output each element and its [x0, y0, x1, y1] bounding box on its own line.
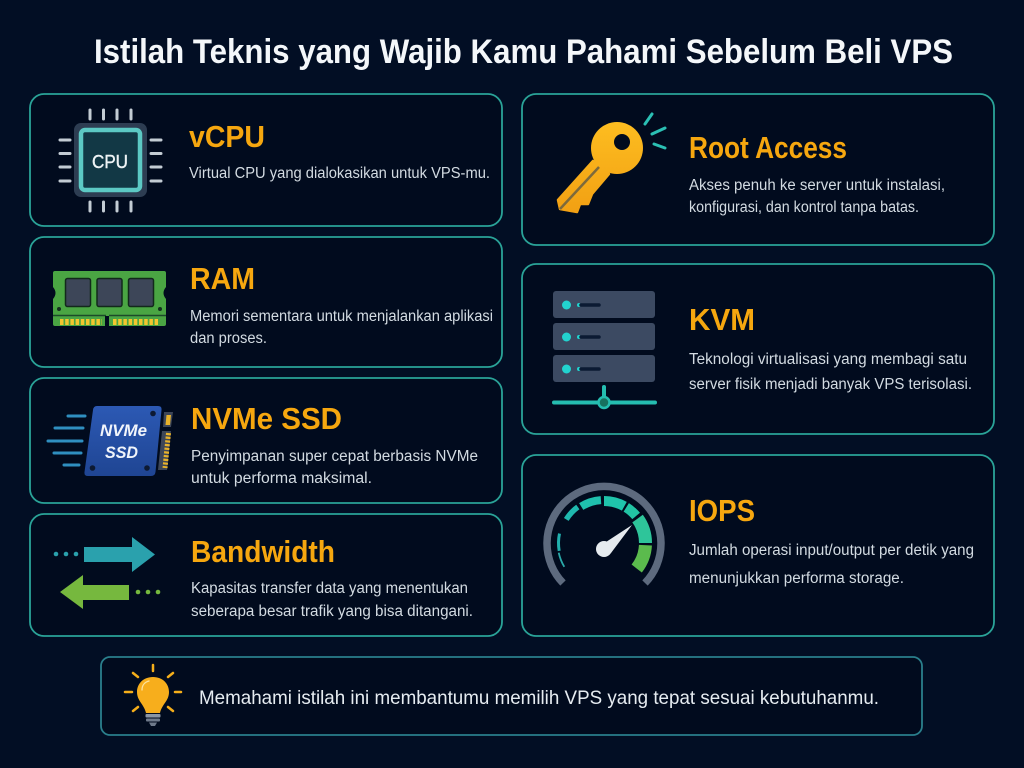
- description: KVM: [689, 351, 972, 393]
- description: IOPS: Jumlah operasi input/output per detik yang: [689, 542, 974, 559]
- panel: KVM: [522, 264, 994, 434]
- heading: vCPU: vCPU: [189, 119, 265, 154]
- icon: NVMe SSD drive: NVMe: [100, 422, 147, 440]
- panel: vCPU: [30, 94, 502, 226]
- icon: NVMe SSD drive: [48, 406, 173, 476]
- icon: CPU chip: [60, 110, 161, 211]
- description: Bandwidth: seberapa besar trafik yang bisa ditangani.: [191, 603, 473, 620]
- description: NVMe SSD: Penyimpanan super cepat berbasis NVMe: [191, 448, 478, 465]
- description: RAM: dan proses.: [190, 330, 267, 347]
- panel: NVMe SSD: [30, 378, 502, 503]
- panel: IOPS: [522, 455, 994, 636]
- description: Bandwidth: Kapasitas transfer data yang menentukan: [191, 580, 468, 597]
- description: NVMe SSD: untuk performa maksimal.: [191, 470, 372, 487]
- heading: IOPS: IOPS: [689, 493, 755, 528]
- description: IOPS: menunjukkan performa storage.: [689, 570, 904, 587]
- description: RAM: [190, 308, 493, 347]
- icon: CPU chip: CPU: [92, 151, 128, 172]
- description: Root Access: Akses penuh ke server untuk instalasi,: [689, 177, 945, 194]
- heading: KVM: KVM: [689, 302, 755, 337]
- icon: golden key: [558, 114, 665, 212]
- description: NVMe SSD: [191, 448, 478, 487]
- description: IOPS: [689, 542, 974, 587]
- heading: Root Access: Root Access: [689, 130, 847, 165]
- icon: speedometer gauge: [540, 479, 668, 607]
- description: Bandwidth: [191, 580, 473, 620]
- description: RAM: Memori sementara untuk menjalankan aplikasi: [190, 308, 493, 325]
- icon: transfer arrows: [54, 537, 160, 609]
- panel: Root Access: [522, 94, 994, 245]
- panel: Bandwidth: [30, 514, 502, 636]
- description: KVM: server fisik menjadi banyak VPS terisolasi.: [689, 376, 972, 393]
- description: Root Access: [689, 177, 945, 216]
- description: Root Access: konfigurasi, dan kontrol tanpa batas.: [689, 199, 919, 216]
- icon: light bulb: [125, 665, 181, 726]
- icon: RAM module: [53, 271, 166, 326]
- description: KVM: Teknologi virtualisasi yang membagi satu: [689, 351, 967, 368]
- callout: bottom tip: [101, 657, 922, 735]
- heading: NVMe SSD: NVMe SSD: [191, 401, 342, 436]
- icon: server stack: [553, 291, 655, 408]
- description: vCPU: Virtual CPU yang dialokasikan untuk VPS-mu.: [189, 165, 490, 182]
- tip text: Memahami istilah ini membantumu memilih VPS yang tepat sesuai kebutuhanmu.: [199, 687, 879, 709]
- heading: Bandwidth: Bandwidth: [191, 534, 335, 569]
- icon: NVMe SSD drive: SSD: [105, 444, 138, 462]
- panel: RAM: [30, 237, 502, 367]
- heading: RAM: RAM: [190, 261, 255, 296]
- title: Istilah Teknis yang Wajib Kamu Pahami Sebelum Beli VPS: [94, 33, 953, 71]
